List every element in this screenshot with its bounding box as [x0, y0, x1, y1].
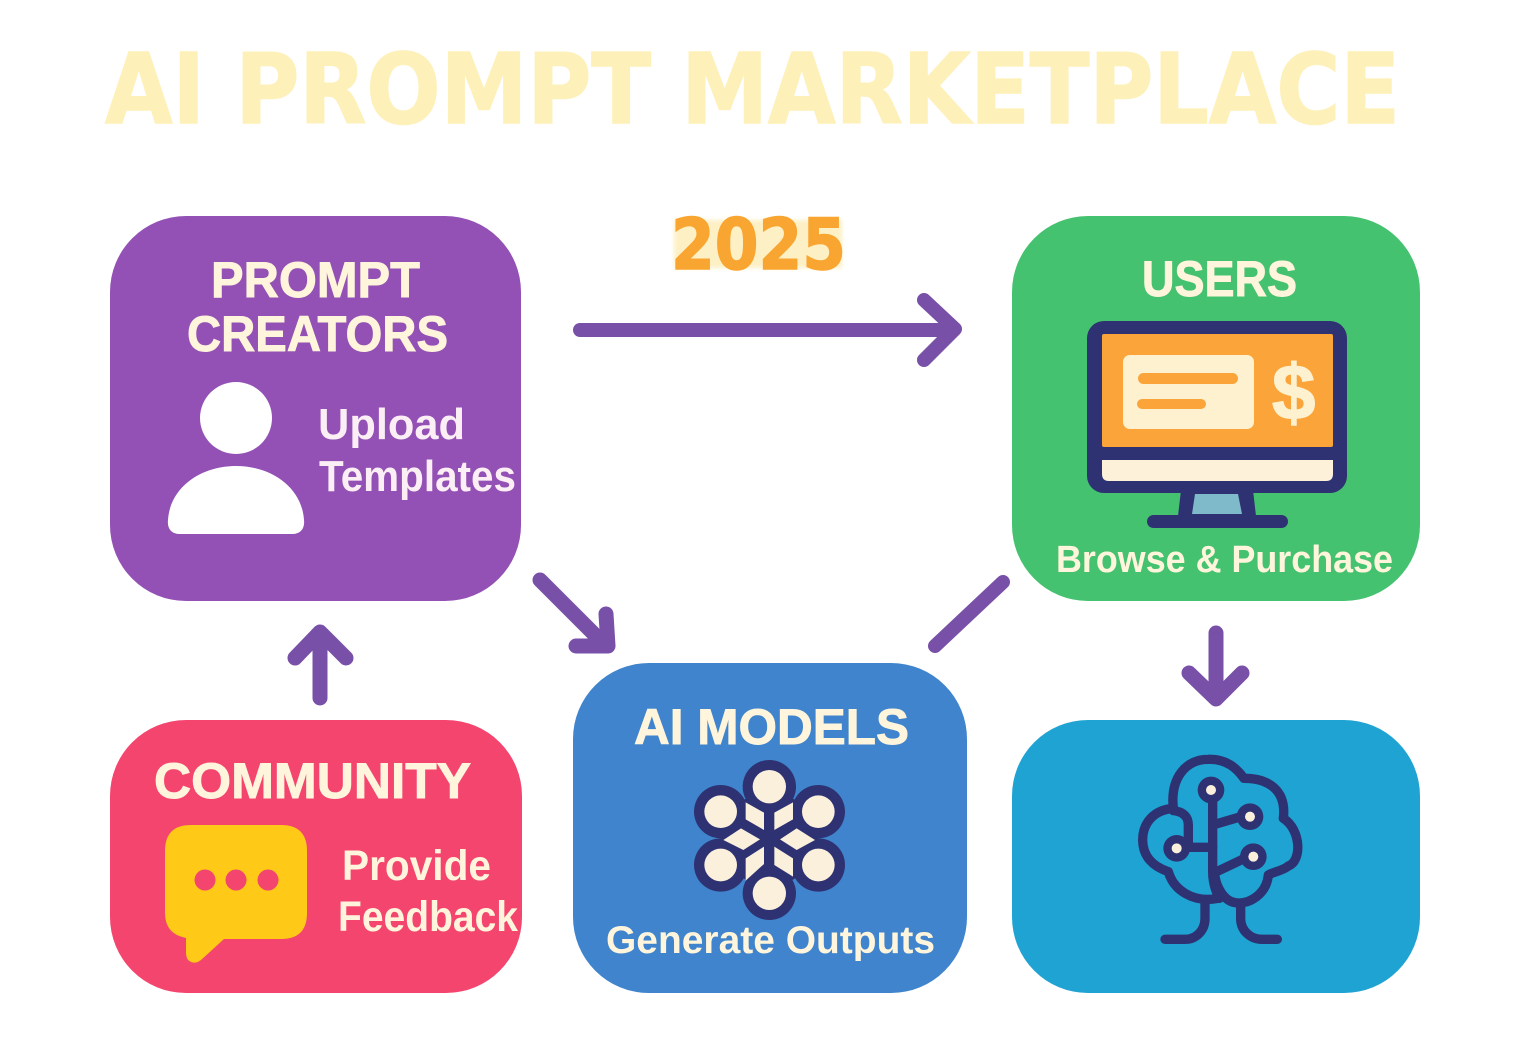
icon: chat bubble	[165, 825, 307, 963]
text: provide feedback: Feedback	[338, 893, 518, 941]
icon: monitor with checkout card	[1087, 321, 1347, 528]
arrow: users to brain	[1189, 633, 1242, 699]
arrow: creators to users	[580, 300, 955, 360]
heading: users: USERS	[1142, 251, 1297, 307]
panel: community	[110, 720, 522, 993]
panel: ai models	[573, 663, 967, 993]
heading: prompt creators: PROMPT	[211, 252, 420, 308]
arrow: creators to ai models	[540, 580, 608, 646]
year text: 2025	[671, 204, 846, 286]
heading: ai models: AI MODELS	[634, 699, 909, 755]
icon: person	[168, 382, 304, 534]
year highlight	[674, 220, 842, 268]
text: provide feedback	[338, 842, 518, 941]
text: upload templates: Templates	[319, 452, 516, 501]
heading: community: COMMUNITY	[154, 753, 471, 809]
panel: prompt creators	[110, 216, 521, 601]
text: provide feedback: Provide	[342, 842, 491, 890]
panel: users	[1012, 216, 1420, 601]
panel background	[1012, 216, 1420, 601]
title: AI PROMPT MARKETPLACE	[105, 33, 1400, 146]
text: upload templates	[318, 400, 516, 501]
panel: ai brain	[1012, 720, 1420, 993]
heading: prompt creators	[187, 252, 448, 362]
text: browse and purchase: Browse & Purchase	[1056, 539, 1393, 581]
icon: monitor with checkout card: $	[1272, 348, 1315, 436]
panel background	[573, 663, 967, 993]
text: upload templates: Upload	[318, 400, 465, 449]
icon: network hexagon	[694, 760, 845, 920]
panel background	[110, 720, 522, 993]
heading: prompt creators: CREATORS	[187, 306, 448, 362]
panel background	[110, 216, 521, 601]
text: generate outputs: Generate Outputs	[606, 919, 935, 962]
panel background	[1012, 720, 1420, 993]
arrow: users to ai models line	[935, 582, 1003, 646]
icon: brain tree circuit	[1143, 759, 1298, 939]
year label	[671, 204, 846, 286]
arrow: community to creators	[295, 632, 346, 698]
